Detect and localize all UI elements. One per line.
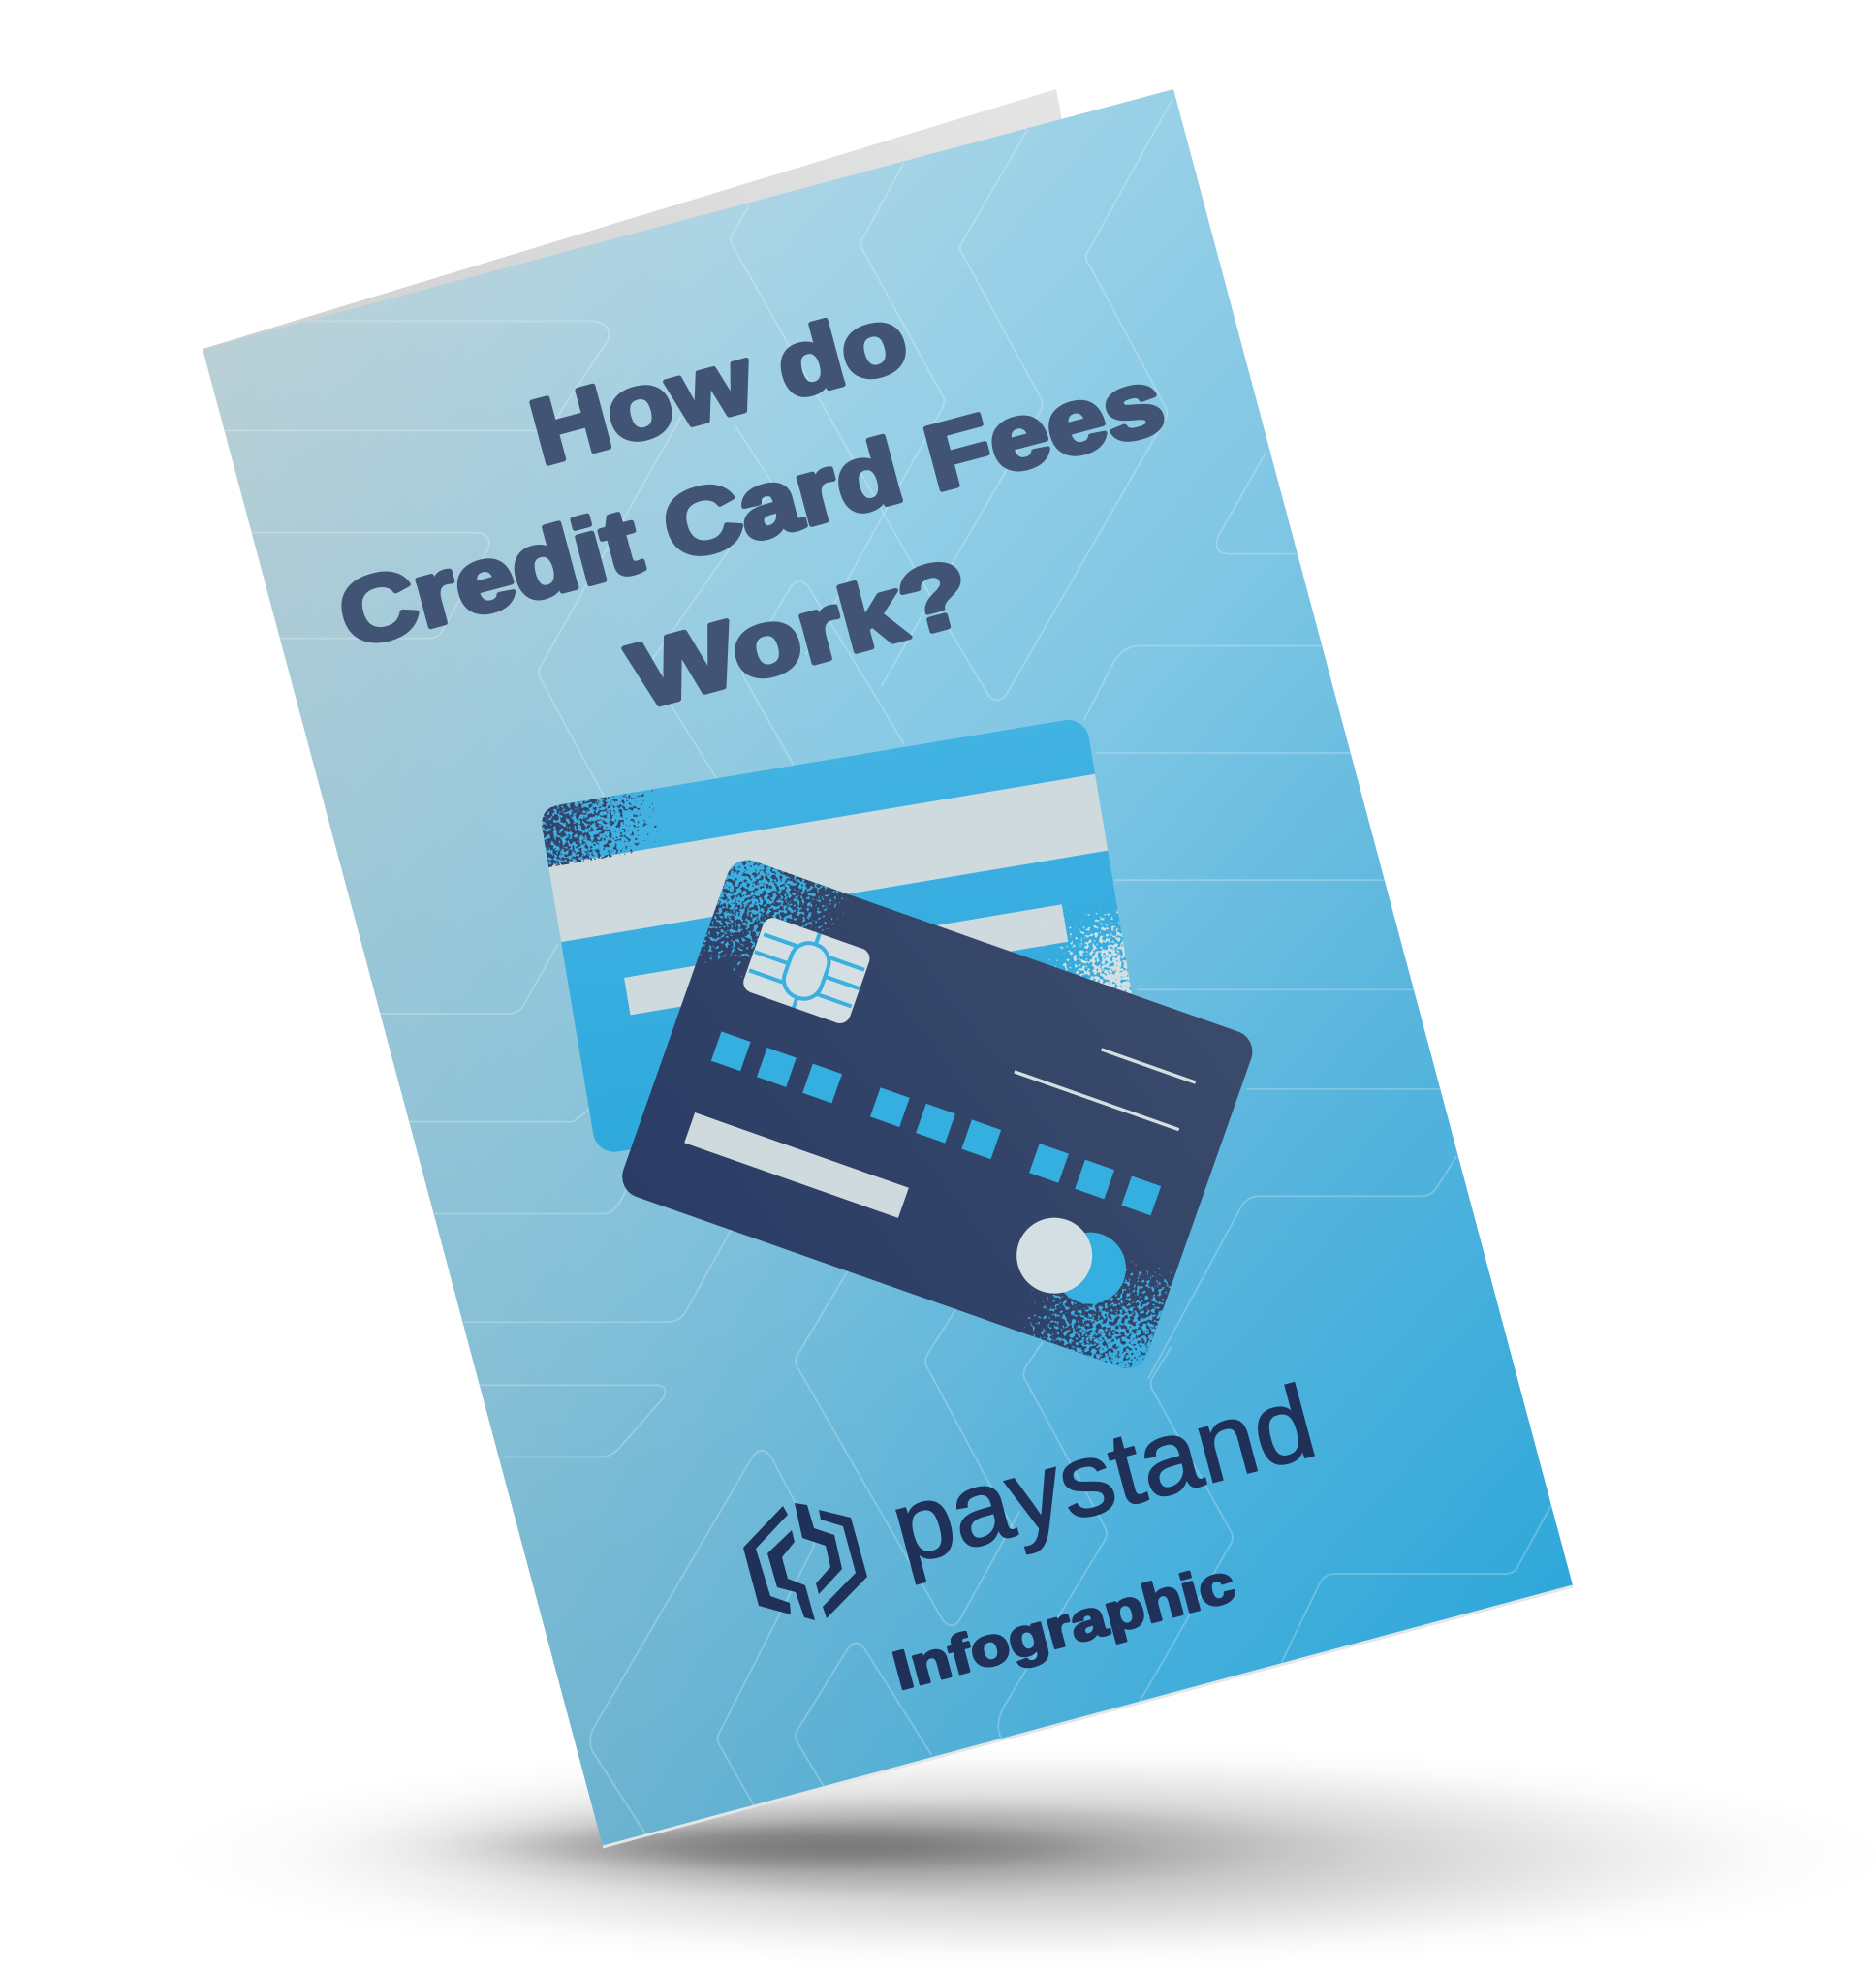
cardholder bar — [684, 1112, 909, 1218]
title: How do — [520, 286, 918, 485]
expiry lines — [1014, 1023, 1196, 1131]
icon: back of credit card — [542, 719, 1132, 1152]
floor shadow — [165, 1741, 1876, 1970]
panel: booklet cover — [203, 89, 1573, 1847]
icon: front of credit card — [622, 861, 1252, 1368]
icon: paystand logo mark — [743, 1503, 867, 1620]
card network logo — [1006, 1207, 1137, 1316]
speckle: top left blue — [698, 861, 847, 977]
icon: chip — [740, 915, 873, 1026]
subtitle: Infographic — [887, 1551, 1241, 1702]
brand name: paystand — [880, 1363, 1327, 1586]
infographic booklet cover scene — [203, 89, 1723, 1948]
magnetic stripe — [548, 774, 1108, 942]
speckle: right light — [1043, 904, 1132, 994]
title: Credit Card Fees — [328, 349, 1174, 668]
back page of booklet — [203, 89, 1066, 349]
signature strip — [624, 904, 1068, 1015]
title: Work? — [619, 540, 981, 729]
speckle: bottom right blue — [1021, 1260, 1172, 1368]
title — [328, 286, 1174, 729]
speckle: top left dark — [542, 790, 660, 867]
card number squares — [711, 1031, 1161, 1215]
